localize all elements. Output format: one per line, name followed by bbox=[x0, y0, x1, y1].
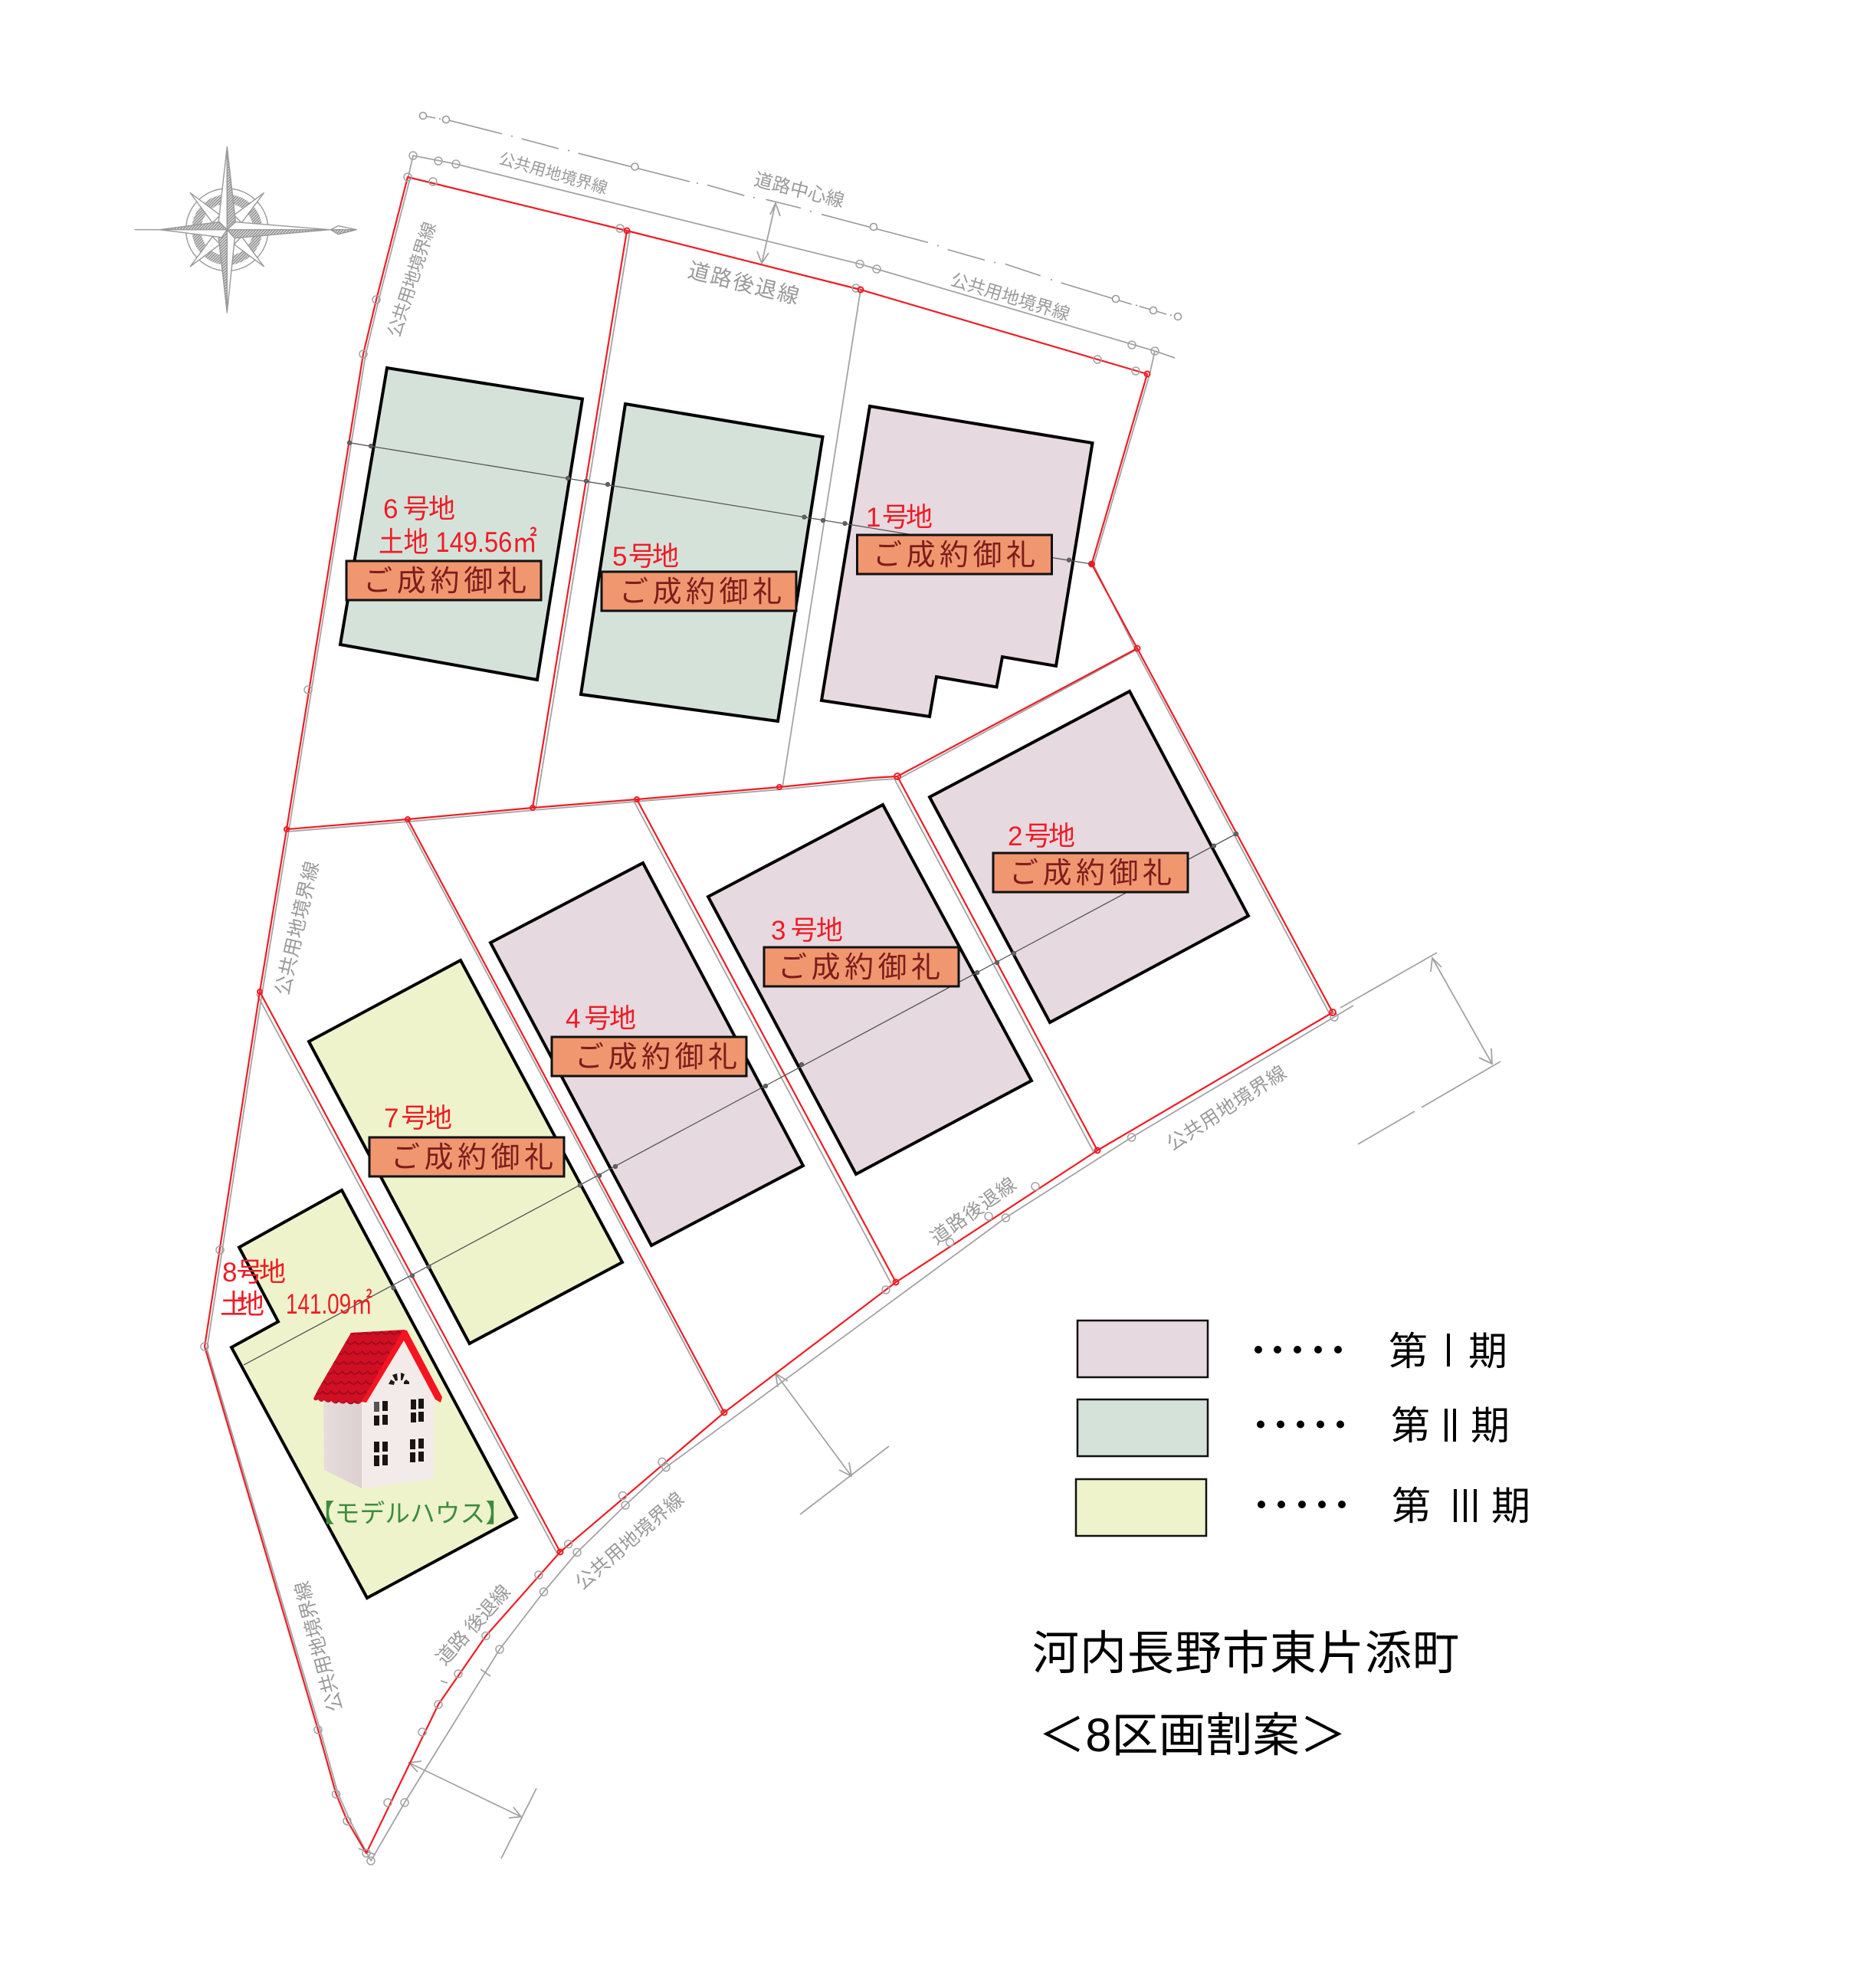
caption: public boundary right: 公共用地境界線 bbox=[1163, 1062, 1291, 1155]
grey survey boundary lines bbox=[207, 156, 1500, 1861]
lot 7 label: ご成約御礼 bbox=[391, 1142, 553, 1174]
legend: phase II: 期 bbox=[1471, 1404, 1510, 1448]
lot 3 label: 3 号地 bbox=[771, 916, 843, 946]
caption: public boundary left middle: 公共用地境界線 bbox=[272, 859, 323, 997]
legend: phase I bbox=[1077, 1321, 1507, 1377]
caption: road centre line: 道路中心線 bbox=[752, 169, 846, 212]
road centre line bbox=[420, 112, 1182, 320]
lot 8 label bbox=[220, 1258, 372, 1320]
lot 6 label: 土地 149.56㎡ bbox=[379, 526, 537, 558]
lot 3 label bbox=[764, 916, 959, 986]
lot 6 label: ご成約御礼 bbox=[363, 566, 526, 598]
lot 7 label: 7 号地 bbox=[384, 1104, 452, 1134]
building: lot 5 (phase II) bbox=[581, 404, 823, 721]
lot 8 label: 141.09㎡ bbox=[286, 1288, 372, 1320]
building: lot 2 (phase I) bbox=[930, 691, 1248, 1022]
legend: phase II bbox=[1077, 1399, 1510, 1456]
legend: phase I: 期 bbox=[1468, 1330, 1507, 1373]
caption: road setback bottom: 道路 後退線 bbox=[432, 1581, 515, 1669]
caption: road setback middle: 道路後退線 bbox=[927, 1173, 1020, 1249]
building: lot 3 (phase I) bbox=[708, 805, 1031, 1174]
lot 4 label bbox=[552, 1004, 746, 1076]
building: lot 8 (phase III) bbox=[231, 1190, 517, 1598]
legend: phase III: 第 bbox=[1392, 1485, 1431, 1528]
icon: compass rose bbox=[135, 147, 356, 313]
lot 4 label: 4 号地 bbox=[566, 1004, 636, 1034]
caption: road setback line top: 道路後退線 bbox=[686, 258, 802, 309]
legend: phase III: 期 bbox=[1491, 1485, 1530, 1528]
building: lot 6 (phase II) bbox=[340, 368, 582, 680]
caption: public boundary bottom left: 公共用地境界線 bbox=[291, 1579, 346, 1714]
legend: phase I: 第 bbox=[1389, 1330, 1428, 1373]
lot 2 label: ご成約御礼 bbox=[1009, 858, 1172, 890]
lot 8 label: 土地 bbox=[220, 1288, 264, 1320]
grey boundary captions bbox=[272, 150, 1291, 1714]
building: lot 1 (phase I) bbox=[822, 406, 1093, 717]
title: plan name: ＜8区画割案＞ bbox=[1038, 1709, 1346, 1761]
title: location: 河内長野市東片添町 bbox=[1032, 1627, 1459, 1679]
building: lot 4 (phase I) bbox=[490, 863, 803, 1245]
lot 6 label bbox=[346, 494, 541, 600]
caption: public boundary left upper: 公共用地境界線 bbox=[384, 219, 440, 340]
lot 3 label: ご成約御礼 bbox=[778, 952, 940, 984]
lot corner survey markers bbox=[201, 152, 1338, 1865]
legend: phase II: 第 bbox=[1391, 1404, 1430, 1448]
caption: public boundary top left: 公共用地境界線 bbox=[497, 150, 609, 198]
caption: public boundary top right: 公共用地境界線 bbox=[949, 269, 1072, 324]
lot 8 label: 8 号地 bbox=[222, 1258, 286, 1288]
lot 1 label bbox=[857, 503, 1051, 574]
lot 2 label: 2 号地 bbox=[1008, 822, 1075, 851]
red lot boundary lines bbox=[205, 177, 1333, 1853]
lot 1 label: ご成約御礼 bbox=[873, 540, 1035, 572]
lot 2 label bbox=[993, 822, 1188, 892]
lot 4 label: ご成約御礼 bbox=[575, 1042, 737, 1074]
lot 5 label: 5 号地 bbox=[612, 542, 679, 572]
red boundary vertices bbox=[257, 228, 1336, 1554]
model house caption: 【モデルハウス】 bbox=[310, 1499, 510, 1527]
lot 5 label: ご成約御礼 bbox=[619, 576, 782, 609]
lot 6 label: 6 号地 bbox=[383, 494, 455, 524]
building: lot 7 (phase III) bbox=[309, 960, 622, 1344]
lot 1 label: 1 号地 bbox=[866, 503, 933, 533]
icon: model house bbox=[313, 1330, 442, 1488]
cross-section survey lines bbox=[244, 441, 1238, 1365]
lot 7 label bbox=[369, 1104, 564, 1176]
lot 5 label bbox=[602, 542, 796, 611]
legend: phase III bbox=[1076, 1479, 1530, 1536]
caption: public boundary bottom: 公共用地境界線 bbox=[571, 1488, 688, 1594]
